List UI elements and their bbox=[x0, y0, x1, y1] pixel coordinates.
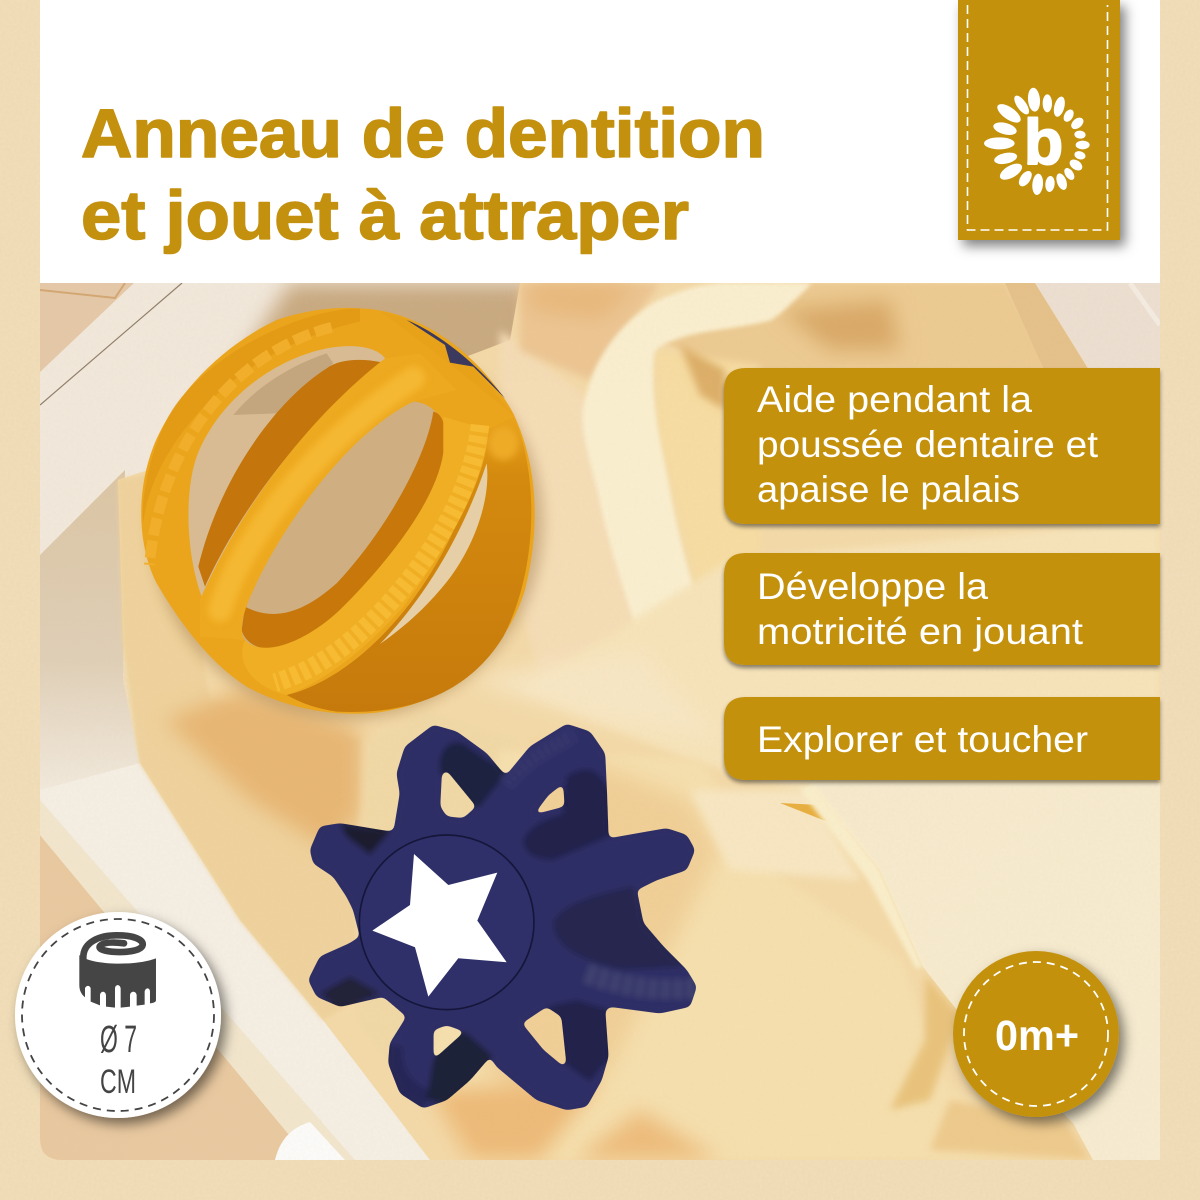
star bbox=[372, 854, 507, 997]
logo tab bbox=[958, 0, 1120, 240]
outer ring bbox=[141, 308, 535, 714]
cloth orange crease bbox=[890, 975, 960, 1110]
icon: navy star teether bbox=[309, 724, 696, 1110]
crate inner wall left bbox=[40, 470, 140, 790]
cream fold bbox=[582, 283, 812, 620]
top cap bbox=[514, 416, 515, 417]
size badge bbox=[15, 912, 221, 1118]
title bbox=[81, 95, 765, 254]
callout: motor skills: motricité en jouant bbox=[757, 611, 1084, 652]
icon: yellow teething ball bbox=[141, 308, 543, 720]
white crate rim bbox=[40, 283, 560, 560]
upper hole bbox=[188, 346, 385, 600]
diagonal band bbox=[202, 358, 414, 640]
age badge bbox=[953, 951, 1119, 1117]
dark inner sides bbox=[553, 887, 683, 970]
callout: teething: poussée dentaire et bbox=[757, 424, 1099, 465]
right sliver bbox=[380, 463, 487, 644]
callout: motor skills: Développe la bbox=[757, 566, 988, 607]
back ring upper bbox=[198, 360, 385, 587]
cream linen right bbox=[810, 783, 1160, 1160]
hot spot bbox=[488, 427, 518, 460]
logo tab: b bbox=[1024, 106, 1063, 178]
callout: teething: Aide pendant la bbox=[757, 379, 1032, 420]
size value: Ø 7 bbox=[100, 1019, 137, 1061]
ribbed ring bbox=[242, 417, 488, 695]
icon: measuring tape bbox=[79, 935, 156, 1008]
crate inner shadow bbox=[236, 283, 520, 356]
callout: teething bbox=[724, 368, 1160, 524]
ribs bbox=[500, 756, 526, 779]
callout: motor skills bbox=[724, 553, 1160, 665]
top ridge pattern bbox=[149, 327, 332, 565]
crate right top bbox=[1005, 283, 1090, 372]
cloth left peach bbox=[118, 470, 360, 1020]
panel: product photo bbox=[40, 283, 1160, 1160]
centre disc bbox=[359, 835, 534, 1010]
cloth under ball right bbox=[500, 330, 640, 680]
cloth tan upper bbox=[668, 283, 1043, 368]
cream cloth middle band bbox=[581, 524, 1160, 788]
size unit: CM bbox=[100, 1063, 136, 1101]
title: Anneau de dentition bbox=[81, 95, 765, 172]
age badge: 0m+ bbox=[995, 1012, 1079, 1060]
wooden floor top left bbox=[40, 283, 134, 372]
lower hole bbox=[242, 402, 444, 648]
header panel bbox=[40, 0, 1160, 283]
callout: explore: Explorer et toucher bbox=[757, 719, 1088, 760]
title: et jouet à attraper bbox=[81, 177, 689, 254]
callout: teething: apaise le palais bbox=[757, 469, 1020, 510]
wooden floor bottom left bbox=[40, 835, 310, 1160]
right ring bbox=[287, 417, 531, 712]
lower middle cloth bbox=[508, 756, 512, 770]
cloth base bbox=[118, 283, 1160, 1160]
navy strip bbox=[407, 320, 505, 398]
cloth weave bbox=[289, 1135, 290, 1158]
callout: explore bbox=[724, 697, 1160, 780]
icon: sunflower logo bbox=[984, 87, 1090, 195]
white crate rim lower bbox=[40, 680, 430, 1160]
back ring lower bbox=[242, 412, 445, 649]
